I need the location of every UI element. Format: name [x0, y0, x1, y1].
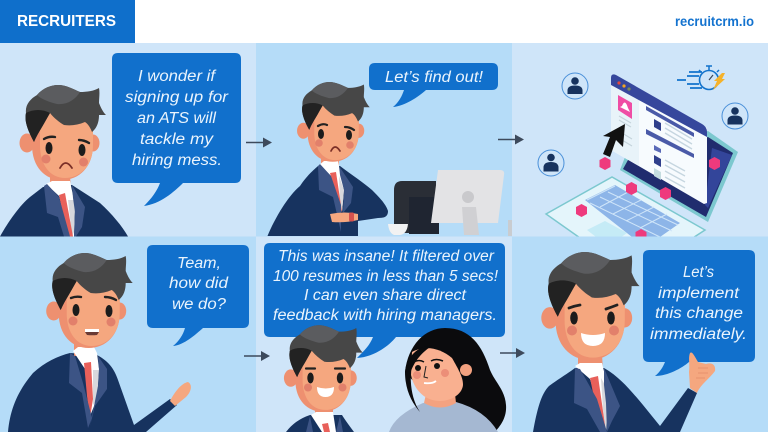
- speech bubble: this change: [655, 305, 743, 322]
- icon: candidate lower left: [538, 150, 564, 176]
- speech bubble: [112, 53, 241, 206]
- speech bubble: [264, 243, 505, 358]
- speech bubble: implement: [658, 285, 740, 302]
- speech bubble: [369, 63, 498, 107]
- panel 3: applicant tracking software on laptop: [512, 43, 768, 245]
- speech bubble: This was insane! It filtered over: [278, 248, 495, 265]
- desk with printer, monitor and cup: [388, 170, 512, 236]
- speech bubble: Team,: [177, 255, 221, 272]
- speech bubble: tackle my: [140, 131, 214, 148]
- speech bubble: we do?: [172, 296, 226, 313]
- icon: pink cubes: [576, 157, 720, 239]
- speech bubble: signing up for: [125, 89, 229, 106]
- icon: candidate right: [722, 103, 748, 129]
- panel 6: approving recruiter: [512, 236, 768, 432]
- speech bubble: 100 resumes in less than 5 secs!: [273, 268, 499, 285]
- character: recruiter checking watch: [268, 82, 388, 236]
- icon: candidate top left: [562, 73, 588, 99]
- character: recruiter thumbs up: [533, 252, 715, 432]
- icon: speed stopwatch with lightning: [677, 66, 725, 90]
- speech bubble: I can even share direct: [304, 287, 467, 304]
- speech bubble: how did: [169, 275, 230, 292]
- illustration: laptop with ATS window: [546, 74, 738, 245]
- header badge: RECRUITERS: [0, 0, 135, 43]
- character: worried recruiter: [0, 85, 128, 236]
- arrow: panel 1 to 2: [246, 138, 272, 148]
- arrow: panel 5 to 6: [500, 348, 525, 358]
- speech bubble: an ATS will: [137, 110, 217, 127]
- arrow: panel 4 to 5: [244, 351, 270, 361]
- panel 2: checking watch at desk: [256, 43, 512, 237]
- speech bubble: I wonder if: [138, 68, 217, 85]
- icon: cursor arrow: [603, 124, 625, 157]
- arrow: panel 2 to 3: [498, 134, 524, 144]
- panel 4: asking the team: [0, 236, 256, 432]
- character: colleague with long dark hair: [389, 328, 506, 432]
- speech bubble: immediately.: [650, 326, 747, 343]
- speech bubble: Let’s find out!: [385, 69, 484, 86]
- speech bubble: [643, 250, 755, 376]
- header badge: RECRUITERS: RECRUITERS: [17, 13, 116, 30]
- character: smiling recruiter: [284, 325, 363, 432]
- speech bubble: hiring mess.: [132, 152, 222, 169]
- speech bubble: [147, 245, 249, 346]
- panel 5: team feedback: [256, 236, 512, 432]
- speech bubble: Let’s: [683, 264, 714, 281]
- speech bubble: feedback with hiring managers.: [273, 307, 497, 324]
- panel 1: wondering recruiter: [0, 43, 256, 237]
- character: recruiter gesturing: [8, 253, 191, 432]
- brand url: recruitcrm.io: [675, 14, 754, 29]
